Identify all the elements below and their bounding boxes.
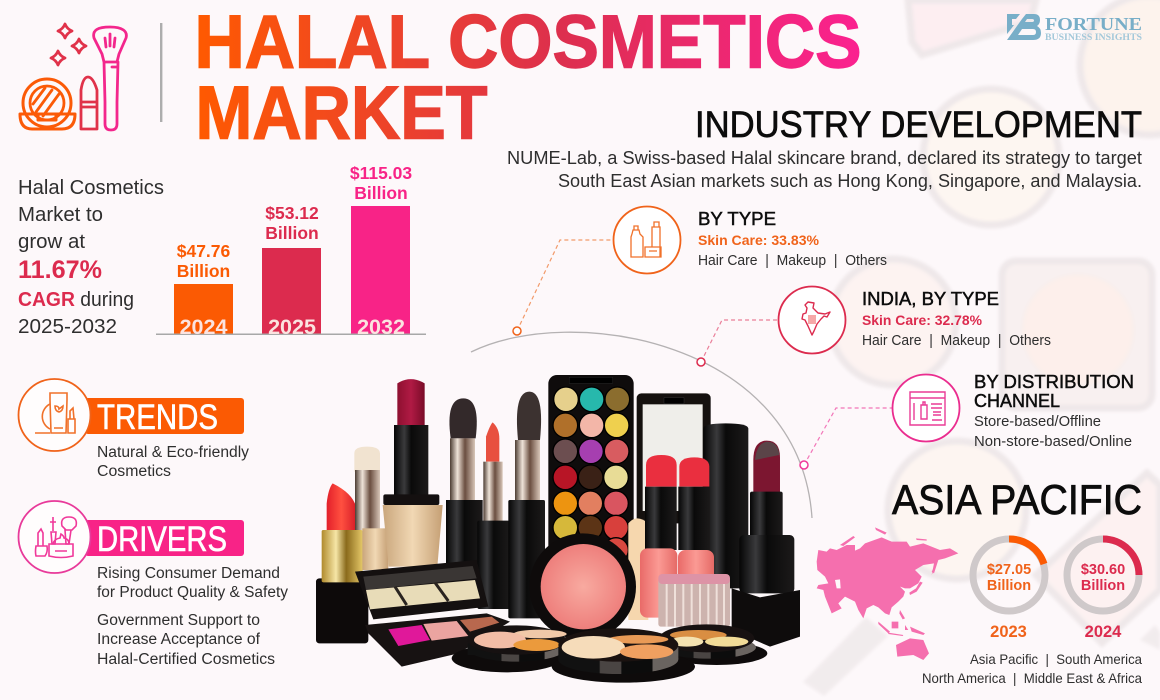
donut chart: 2023: $27.05	[987, 562, 1031, 578]
panel: drivers: Government Support to	[97, 612, 260, 629]
bar chart: market size: Billion	[265, 223, 319, 243]
bar chart: market size: Billion	[177, 261, 230, 281]
logo: Fortune Business Insights: BUSINESS INSIGHTS	[1045, 33, 1142, 43]
right lipstick	[732, 441, 800, 647]
donut chart: 2024: $30.60	[1081, 562, 1125, 578]
bar chart: market size: 2025	[268, 315, 316, 339]
panel: by type: Hair Care | Makeup | Others	[698, 253, 887, 269]
title: HALAL COSMETICS	[194, 0, 862, 84]
bar chart: market size: $115.03	[350, 163, 412, 183]
panel: drivers: DRIVERS	[97, 520, 227, 559]
panel: by distribution channel: Non-store-based/Online	[974, 434, 1132, 450]
logo: Fortune Business Insights	[1007, 14, 1142, 43]
text: industry development description: NUME-Lab, a Swiss-based Halal skincare brand, declared its strategy to target	[507, 148, 1142, 168]
illustration: cosmetics collection	[316, 375, 800, 683]
round compact right	[659, 624, 767, 665]
panel: by type: BY TYPE	[698, 208, 776, 229]
coral lipstick	[477, 422, 510, 609]
panel: trends	[18, 379, 249, 480]
panel: by distribution channel: BY DISTRIBUTION	[974, 371, 1134, 392]
bar chart: market size: Billion	[354, 183, 408, 203]
text: CAGR statement: 2025-2032	[18, 316, 117, 338]
donut chart: 2023: 2023	[990, 623, 1027, 641]
open palette	[355, 560, 510, 667]
panel: drivers: Rising Consumer Demand	[97, 565, 280, 582]
panel: india by type: Hair Care | Makeup | Others	[862, 333, 1051, 349]
text: CAGR statement: CAGR during	[18, 289, 134, 311]
bar chart: market size: 2032	[357, 315, 405, 339]
text: CAGR statement: Halal Cosmetics	[18, 177, 164, 199]
bar chart: market size	[156, 163, 426, 339]
blush compact	[529, 533, 636, 640]
panel: by distribution channel: Store-based/Offline	[974, 414, 1101, 430]
text: CAGR statement	[18, 177, 164, 338]
text: regions: Asia Pacific | South America	[970, 651, 1142, 667]
text: regions	[922, 651, 1142, 686]
text: CAGR statement: 11.67%	[18, 256, 102, 284]
text: CAGR statement: Market to	[18, 204, 103, 226]
brush one	[446, 398, 483, 563]
brush two	[508, 392, 545, 618]
text: industry development description	[507, 148, 1142, 191]
title: MARKET	[196, 70, 488, 154]
donut chart: 2023: Billion	[987, 578, 1031, 594]
panel: by type	[614, 206, 887, 274]
left red lipstick	[316, 483, 368, 643]
text: industry development description: South East Asian markets such as Hong Kong, Singapore, and Malaysia.	[558, 171, 1142, 191]
divider	[160, 23, 162, 122]
panel: drivers: Increase Acceptance of	[97, 631, 261, 648]
heading: asia pacific: ASIA PACIFIC	[892, 476, 1142, 523]
panel: trends: Natural & Eco-friendly	[97, 444, 249, 461]
map: asia pacific	[817, 527, 958, 660]
title	[194, 0, 862, 154]
bar chart: market size: $53.12	[265, 203, 319, 223]
cream stick	[354, 447, 388, 570]
bar chart: market size: 2024	[180, 315, 227, 339]
text: CAGR statement: grow at	[18, 231, 85, 253]
donut chart: 2024	[1067, 539, 1139, 641]
panel: drivers: for Product Quality & Safety	[97, 584, 288, 601]
tall black cylinder	[703, 423, 748, 588]
mirror compact	[637, 393, 711, 523]
panel: trends: TRENDS	[97, 398, 218, 437]
panel: india by type	[778, 286, 1051, 354]
donut chart: 2024: Billion	[1081, 578, 1125, 594]
donut chart: 2023	[973, 539, 1045, 641]
panel: trends: Cosmetics	[97, 463, 171, 480]
panel: by distribution channel: CHANNEL	[974, 390, 1060, 411]
round compact centre	[552, 628, 695, 683]
donut chart: 2024: 2024	[1085, 623, 1122, 641]
tall eyeshadow palette	[548, 375, 634, 563]
panel: drivers: Halal-Certified Cosmetics	[97, 651, 275, 668]
nail polish pair	[640, 455, 714, 618]
arc with connectors	[471, 240, 892, 518]
panel: india by type: INDIA, BY TYPE	[862, 288, 999, 309]
icon: cosmetics logo	[20, 24, 126, 130]
round compact left	[452, 625, 567, 672]
logo: Fortune Business Insights: FORTUNE	[1045, 14, 1142, 34]
panel: drivers	[18, 501, 288, 668]
panel: india by type: Skin Care: 32.78%	[862, 313, 982, 328]
panel: by type: Skin Care: 33.83%	[698, 233, 819, 248]
panel: by distribution channel	[892, 371, 1134, 450]
bar chart: market size: $47.76	[177, 241, 231, 261]
cotton swab box	[658, 574, 730, 627]
text: regions: North America | Middle East & Africa	[922, 670, 1142, 686]
crimson lipstick	[383, 379, 443, 567]
foundation bottle	[628, 518, 648, 620]
